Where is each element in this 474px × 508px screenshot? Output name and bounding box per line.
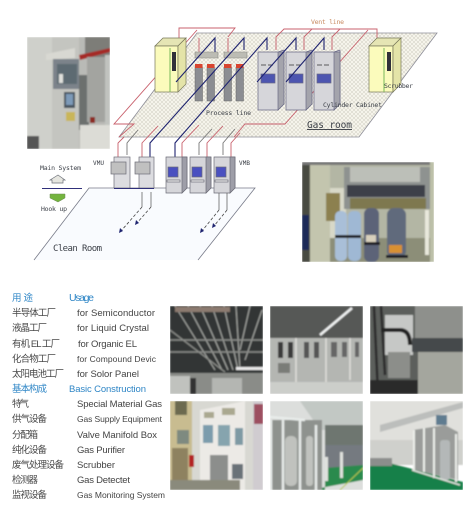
arrow heads [119, 220, 216, 233]
construction rows: 纯化设备 [12, 444, 47, 456]
usage rows: for Semiconductor [77, 308, 155, 319]
usage rows: 太阳电池工厂 [12, 368, 64, 380]
label: VMB: VMB [239, 160, 250, 167]
label: process line: Process line [206, 109, 251, 117]
label: VMU: VMU [93, 160, 104, 167]
label: hook up: Hook up [41, 205, 67, 213]
usage rows: 半导体工厂 [12, 307, 56, 319]
process lines [150, 38, 324, 157]
gas cylinders [195, 52, 247, 101]
construction rows: Gas Detectet [77, 475, 130, 486]
photo: gas cabinet [27, 37, 110, 149]
construction rows: Valve Manifold Box [77, 430, 157, 441]
construction rows [12, 398, 165, 501]
usage rows: for Compound Devic [77, 354, 157, 364]
scrubber cabinet right [369, 38, 401, 92]
usage rows [12, 307, 157, 380]
photo: cylinder frames on green floor [270, 401, 363, 490]
vent and exhaust lines [114, 28, 377, 137]
label: vent line: Vent line [311, 18, 344, 26]
heading: usage [12, 292, 94, 304]
heading: basic construction [12, 383, 146, 395]
VMU boxes [111, 157, 154, 188]
usage rows: 液晶工厂 [12, 322, 47, 334]
photo: ceiling pipes [170, 306, 263, 394]
construction rows: Gas Monitoring System [77, 490, 165, 500]
heading: basic construction: Basic Construction [69, 384, 146, 395]
cylinder cabinets [258, 50, 340, 110]
icon: up arrow [50, 175, 65, 183]
usage rows: 化合物工厂 [12, 353, 56, 365]
photo: valve wall [370, 306, 463, 394]
construction rows: 监视设备 [12, 489, 47, 501]
legend: main system and hook up [40, 164, 82, 213]
floor line [114, 188, 154, 190]
diagram: gas room [114, 18, 437, 157]
construction rows: 供气设备 [12, 413, 47, 425]
label: main system: Main System [40, 164, 81, 172]
heading: basic construction: 基本构成 [12, 383, 47, 395]
photo: gas rack on green floor [370, 401, 463, 490]
photo: cylinder room [302, 162, 434, 262]
gas room floor [119, 33, 437, 137]
usage rows: for Solor Panel [77, 369, 139, 380]
usage rows: for Organic EL [78, 339, 137, 350]
construction rows: 特气 [12, 398, 29, 410]
construction rows: Special Material Gas [77, 399, 162, 410]
usage rows: 有机 EL 工厂 [12, 338, 60, 350]
scrubber cabinet left [155, 38, 186, 92]
photo: white gas panels [170, 401, 263, 490]
construction rows: Scrubber [77, 460, 115, 471]
construction rows: 废气处理设备 [12, 459, 64, 471]
connecting pipes [118, 125, 240, 157]
label: clean room: Clean Room [53, 244, 102, 254]
icon: down arrow [50, 194, 65, 202]
diagram: clean room [34, 157, 255, 260]
construction rows: 检测器 [12, 474, 38, 486]
list: usage and construction [12, 292, 165, 501]
supply arrows [121, 192, 227, 231]
usage rows: for Liquid Crystal [77, 323, 149, 334]
VMB boxes [166, 157, 235, 193]
heading: usage: 用 途 [12, 292, 33, 304]
label: gas room: Gas room [307, 120, 352, 131]
divider line [42, 188, 82, 190]
heading: usage: Usage [69, 292, 94, 304]
label: scrubber: Scrubber [384, 82, 413, 90]
construction rows: 分配箱 [12, 429, 38, 441]
construction rows: Gas Purifier [77, 445, 125, 456]
construction rows: Gas Supply Equipment [77, 414, 163, 424]
clean room floor [34, 188, 255, 260]
photo: gas cabinets row [270, 306, 363, 394]
label: cylinder cabinet: Cylinder Cabinet [323, 101, 382, 109]
